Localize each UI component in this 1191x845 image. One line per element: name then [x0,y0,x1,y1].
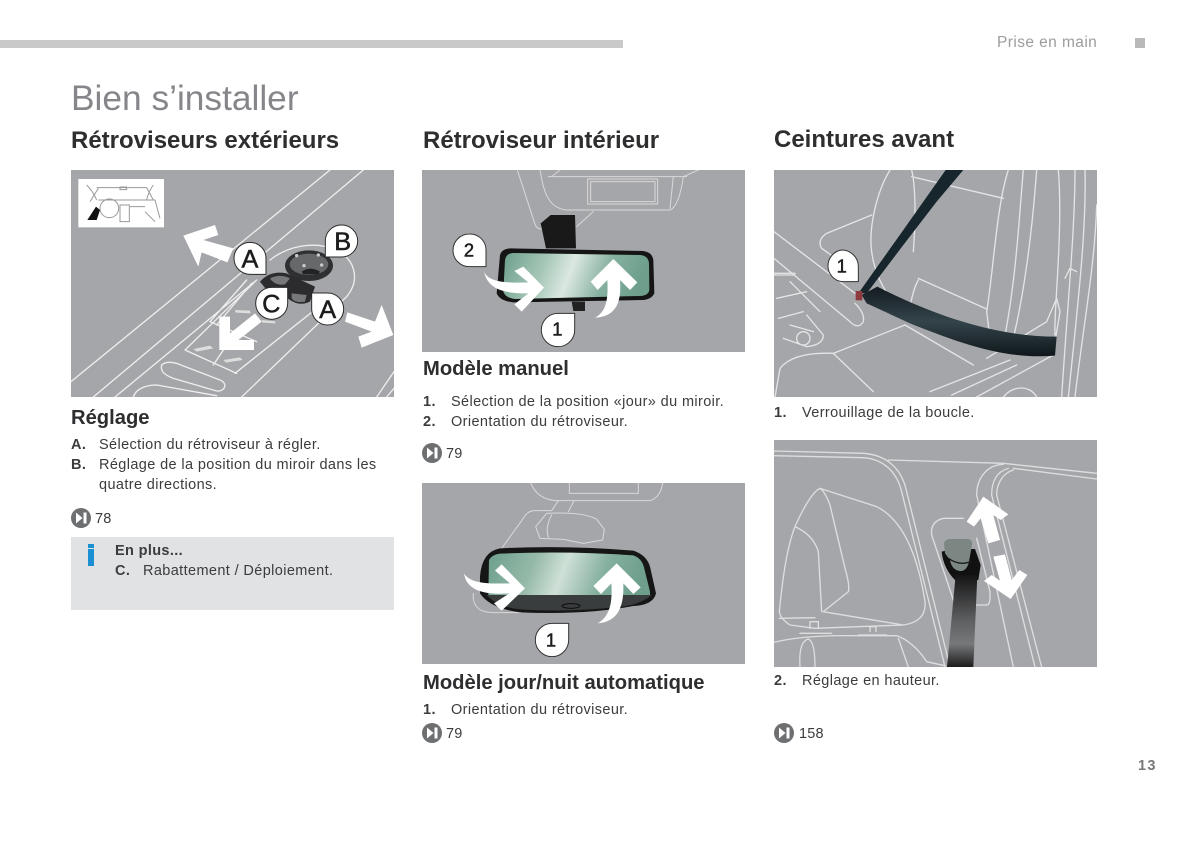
arrow: vertical orientation [591,259,637,318]
panel: seat belt buckle illustration [774,170,1097,397]
panel: exterior mirror controls illustration [71,170,394,397]
list item B: quatre directions. [99,477,217,493]
belt strap [947,575,977,667]
mirror body [480,547,656,613]
heading: Rétroviseur intérieur: Rétroviseur intérieur [423,127,659,154]
list item 1 automatic: Orientation du rétroviseur. [451,702,628,718]
callout A [234,242,266,274]
callout A lower [312,293,344,325]
list item B: B. [71,457,86,473]
subheading: Réglage: Réglage [71,407,150,429]
panel: automatic interior mirror illustration [422,483,745,664]
callout 1: 1 [552,319,562,340]
inset: car dashboard locator [78,179,164,227]
list item 2 belts: Réglage en hauteur. [802,673,940,689]
list item 1 manual: Sélection de la position «jour» du miroir. [451,394,724,410]
icon: info i [88,544,94,566]
mirror glass [488,552,650,595]
panel: seat belt height illustration [774,440,1097,667]
callout box: En plus [71,537,394,610]
mirror glass [503,253,649,299]
list item 2 belts: 2. [774,673,787,689]
icon: switch A and C [260,273,315,304]
list item 2 manual: Orientation du rétroviseur. [451,414,628,430]
header bar [0,40,623,48]
page reference 78: 78 [95,511,112,527]
callout 1: 1 [546,629,556,650]
callout C [256,287,288,319]
callout 1 [541,313,575,347]
panel: manual interior mirror illustration [422,170,745,352]
page reference 78 [71,508,112,528]
list item A: Sélection du rétroviseur à régler. [99,437,321,453]
arrow: down right [345,305,393,348]
callout B: B [334,228,351,256]
icon: switch B [285,250,333,281]
list item B [71,457,377,493]
arrow: horizontal orientation [464,564,525,611]
arrow: vertical orientation [593,563,641,623]
mirror body [497,248,654,302]
page number: 13 [1138,758,1157,774]
heading: Rétroviseurs extérieurs: Rétroviseurs extérieurs [71,127,339,154]
list item 1 belts: 1. [774,405,787,421]
seat belt anchor [942,539,981,580]
arrow: down [984,554,1027,599]
callout 1: 1 [837,255,847,276]
callout B [325,225,358,257]
page reference 79 manual: 79 [446,446,463,462]
title: Bien s’installer [71,79,299,118]
mirror mount [541,215,576,248]
list item B: Réglage de la position du miroir dans les [99,457,377,473]
list item 1 belts: Verrouillage de la boucle. [802,405,975,421]
callout 2: 2 [464,239,474,260]
heading: Ceintures avant: Ceintures avant [774,126,954,153]
callout C: C [262,290,280,318]
callout item C: Rabattement / Déploiement. [143,563,333,579]
belt: lap strap [862,287,1057,356]
belt: shoulder strap [858,170,963,293]
callout 1 [535,623,569,657]
page reference 79 manual [422,443,463,463]
list item A: A. [71,437,86,453]
page reference 79 automatic [422,723,463,743]
callout A: A [242,245,259,273]
callout 2 [453,234,486,267]
icon: red buckle [856,291,862,300]
callout 1 [828,250,858,282]
subheading: Modèle manuel: Modèle manuel [423,358,569,380]
section marker square [1135,38,1145,48]
arrow: down left [219,313,262,350]
page reference 158 [774,723,824,743]
list item 1 automatic: 1. [423,702,436,718]
arrow: up left [183,225,233,267]
subheading: Modèle jour/nuit automatique: Modèle jour/nuit automatique [423,672,705,694]
callout item C: C. [115,563,130,579]
callout A lower: A [319,296,336,324]
page reference 79 automatic: 79 [446,726,463,742]
callout title: En plus... [115,543,183,559]
section name: Prise en main [997,34,1097,51]
page reference 158: 158 [799,726,824,742]
list item 1 manual: 1. [423,394,436,410]
arrow: up [967,497,1008,543]
arrow: horizontal orientation [484,267,544,312]
list item 2 manual: 2. [423,414,436,430]
